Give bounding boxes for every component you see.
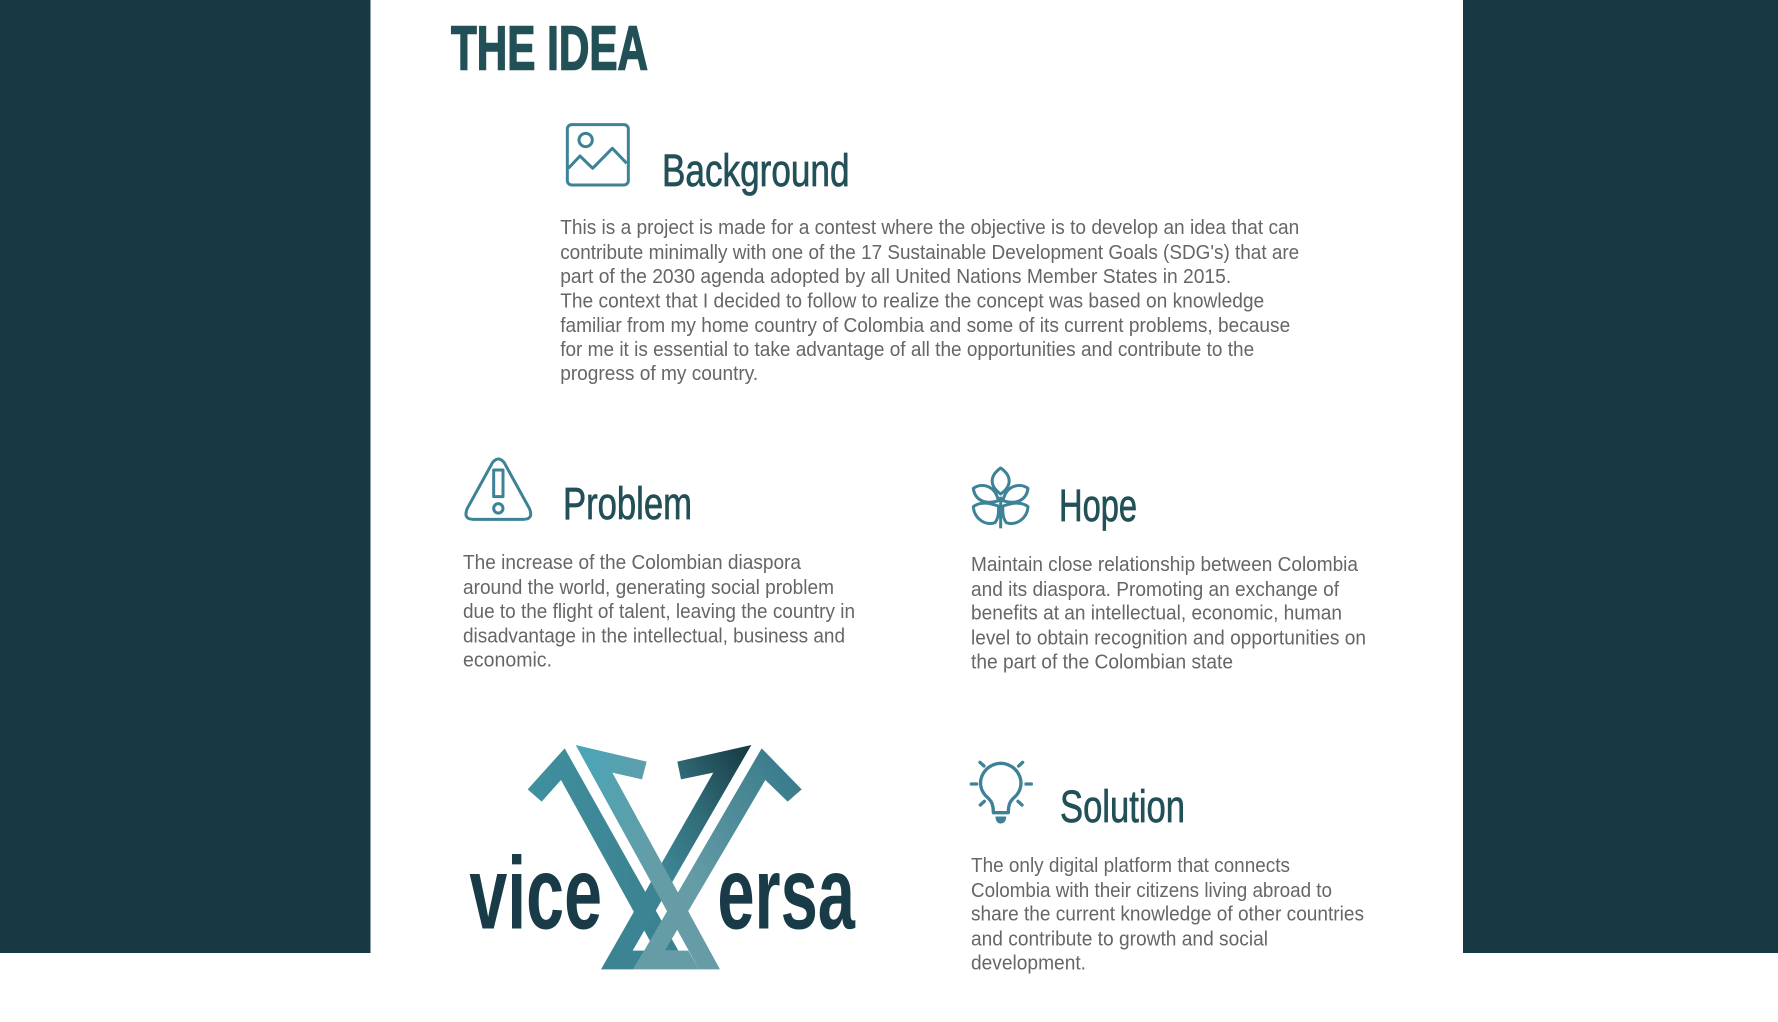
heading: solution: Solution (1060, 781, 1185, 832)
panel: solution (971, 762, 1364, 974)
text block: problem: due to the flight of talent, leaving the country in (463, 600, 855, 623)
panel: problem (463, 459, 855, 671)
text block: problem: around the world, generating social problem (463, 576, 834, 599)
text block: background: familiar from my home country of Colombia and some of its current problems, because (560, 314, 1290, 337)
text block: solution: share the current knowledge of other countries (971, 902, 1364, 925)
logo: vice versa (469, 745, 855, 969)
logo strand: dark arrow (601, 745, 751, 969)
text block: problem: economic. (463, 648, 552, 671)
text block: solution (971, 854, 1364, 974)
text block: problem (463, 551, 855, 671)
text block: background: progress of my country. (560, 362, 758, 385)
text block: background: The context that I decided to follow to realize the concept was based on knowledge (560, 290, 1264, 312)
text block: background: contribute minimally with one of the 17 Sustainable Development Goals (SDG's) that are (560, 241, 1299, 264)
text block: hope: Maintain close relationship between Colombia (971, 553, 1359, 576)
logo strand: left arrow (528, 748, 678, 951)
text block: hope: and its diaspora. Promoting an exchange of (971, 578, 1339, 601)
logo word: ersa: ersa (717, 835, 855, 950)
logo word: vice: vice (469, 835, 602, 950)
heading: hope: Hope (1059, 480, 1137, 531)
text block: hope: the part of the Colombian state (971, 651, 1233, 674)
logo strand: light arrow (576, 745, 720, 969)
left dark side band (0, 0, 370, 953)
text block: hope: level to obtain recognition and opportunities on (971, 627, 1366, 650)
text block: problem: disadvantage in the intellectual, business and (463, 624, 845, 647)
icon: image (567, 125, 628, 185)
heading: problem: Problem (563, 478, 692, 529)
text block: background: for me it is essential to take advantage of all the opportunities and contribute to the (560, 338, 1254, 361)
text block: background (560, 216, 1299, 385)
panel: background (560, 125, 1299, 385)
panel: hope (971, 468, 1366, 674)
text block: hope (971, 553, 1366, 674)
text block: solution: Colombia with their citizens living abroad to (971, 879, 1332, 902)
icon: warning triangle (466, 459, 531, 519)
text block: background: This is a project is made for a contest where the objective is to develop an idea that can (560, 216, 1299, 239)
text block: hope: benefits at an intellectual, economic, human (971, 602, 1342, 625)
text block: solution: The only digital platform that connects (971, 854, 1290, 877)
text block: solution: development. (971, 951, 1086, 974)
right dark side band (1463, 0, 1778, 953)
icon: light bulb (971, 762, 1031, 823)
title: THE IDEA (451, 14, 648, 84)
text block: solution: and contribute to growth and social (971, 927, 1268, 950)
text block: problem: The increase of the Colombian diaspora (463, 551, 802, 574)
text block: background: part of the 2030 agenda adopted by all United Nations Member States in 2015. (560, 265, 1231, 288)
heading: background: Background (662, 145, 850, 196)
logo strand: right arrow and base (633, 748, 802, 969)
icon: leaf sprout (973, 468, 1028, 528)
